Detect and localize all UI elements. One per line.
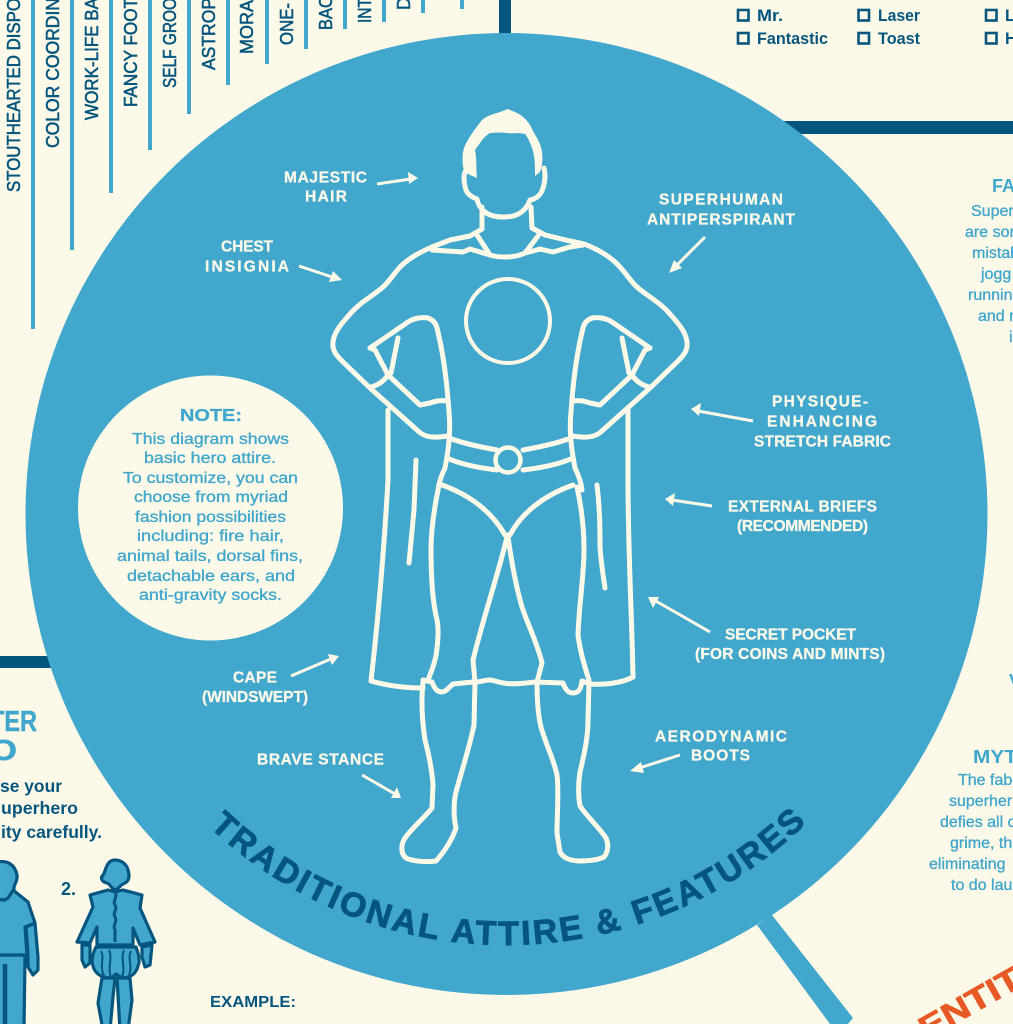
labels: attire features: HAIR — [305, 188, 347, 206]
callout: note bubble: basic hero attire. — [144, 450, 276, 467]
text block: fabric facts (right, cropped): i — [1009, 329, 1013, 346]
label: 2.: 2. — [61, 879, 76, 899]
text block: fabric facts (right, cropped): runnin — [968, 287, 1012, 304]
callout: note bubble: fashion possibilities — [135, 509, 286, 526]
labels: attire features: ENHANCING — [767, 414, 877, 430]
head — [464, 168, 545, 217]
arrows — [291, 172, 753, 798]
figure 1: casual outfit (cropped) — [0, 862, 38, 1024]
text block: myth (right, cropped): superher — [949, 793, 1013, 810]
labels: attire features: CHEST — [221, 238, 274, 256]
callout: note bubble: This diagram shows — [132, 431, 289, 448]
labels: attire features: CAPE — [233, 670, 277, 686]
labels: attire features: BOOTS — [691, 748, 750, 764]
text block: choose your superhero identity: ity carefully. — [1, 822, 102, 842]
callout: note bubble: including: fire hair, — [137, 528, 284, 545]
checklist: name options: Fantastic — [757, 30, 828, 48]
text block: choose your superhero identity — [0, 776, 102, 842]
callout: note bubble: anti-gravity socks. — [139, 587, 282, 604]
labels: attire features: MAJESTIC — [284, 170, 367, 186]
text block: myth (right, cropped): MYT — [973, 747, 1013, 767]
hem — [371, 677, 633, 693]
text block: myth (right, cropped): grime, th — [950, 835, 1012, 852]
chart: superhero skills vertical lines — [4, 0, 464, 329]
neck, shoulders and collar — [400, 207, 482, 267]
checklist: name options — [738, 7, 1013, 48]
checklist: name options: Toast — [878, 30, 920, 48]
heading: traditional attire and features (curved): TRADITIONAL ATTIRE & FEATURES — [214, 809, 804, 946]
labels: attire features: (FOR COINS AND MINTS) — [695, 646, 885, 663]
divider bars — [0, 0, 1013, 668]
callout: note bubble: detachable ears, and — [127, 568, 295, 585]
labels: attire features: AERODYNAMIC — [655, 728, 787, 746]
text block: fabric facts (right, cropped): mistal — [972, 245, 1013, 262]
text block: choose your superhero identity: se your — [0, 776, 62, 796]
hair — [462, 109, 542, 178]
heading: alter ego (cropped) — [0, 706, 37, 767]
labels: attire features: ANTIPERSPIRANT — [647, 212, 796, 228]
labels: attire features: STRETCH FABRIC — [754, 434, 891, 450]
briefs — [442, 485, 573, 535]
text block: myth (right, cropped): eliminating — [929, 856, 1005, 873]
labels: attire features: (WINDSWEPT) — [202, 689, 308, 706]
callout: note bubble: NOTE: — [180, 405, 242, 425]
labels: attire features: EXTERNAL BRIEFS — [728, 498, 877, 516]
checklist: name options: Laser — [878, 7, 921, 25]
labels: attire features: BRAVE STANCE — [257, 752, 384, 768]
labels: attire features: PHYSIQUE- — [772, 394, 868, 410]
chart: superhero skills vertical lines: ONE- — [277, 3, 297, 45]
labels: attire features: SECRET POCKET — [725, 626, 857, 644]
text block: myth (right, cropped): to do lau — [951, 877, 1012, 894]
callout: note bubble: choose from myriad — [134, 489, 288, 506]
cape sides — [371, 410, 388, 681]
labels: attire features: SUPERHUMAN — [659, 192, 783, 208]
text block: myth (right, cropped): The fab — [958, 772, 1012, 789]
left boot — [402, 682, 475, 862]
labels: attire features: INSIGNIA — [205, 258, 289, 276]
text block: fabric facts (right, cropped): Super — [971, 203, 1013, 220]
insignia — [466, 279, 550, 363]
chart: superhero skills vertical lines: MORA — [237, 0, 257, 54]
connector: diagonal light-blue bar — [757, 915, 853, 1024]
text block: choose your superhero identity: uperhero — [1, 798, 78, 818]
buckle — [496, 448, 520, 472]
labels: attire features: (RECOMMENDED) — [737, 518, 868, 535]
label: example: EXAMPLE: — [210, 994, 296, 1011]
figure: superhero outline — [333, 109, 687, 862]
callout: note bubble: To customize, you can — [123, 470, 298, 487]
belt — [449, 438, 497, 450]
left half of the body — [333, 267, 497, 490]
hand and forearm — [370, 318, 450, 490]
text block: myth (right, cropped) — [929, 671, 1013, 894]
right boot — [537, 682, 608, 861]
labels: attire features — [202, 170, 891, 768]
legs — [428, 490, 438, 680]
text block: fabric facts (right, cropped): jogg — [980, 266, 1011, 283]
callout: note bubble — [78, 376, 343, 640]
text block: fabric facts (right, cropped) — [965, 176, 1013, 346]
figure 2: renaissance outfit — [77, 860, 155, 1024]
callout: note bubble: animal tails, dorsal fins, — [117, 548, 303, 565]
checklist: name options: Mr. — [757, 7, 783, 25]
